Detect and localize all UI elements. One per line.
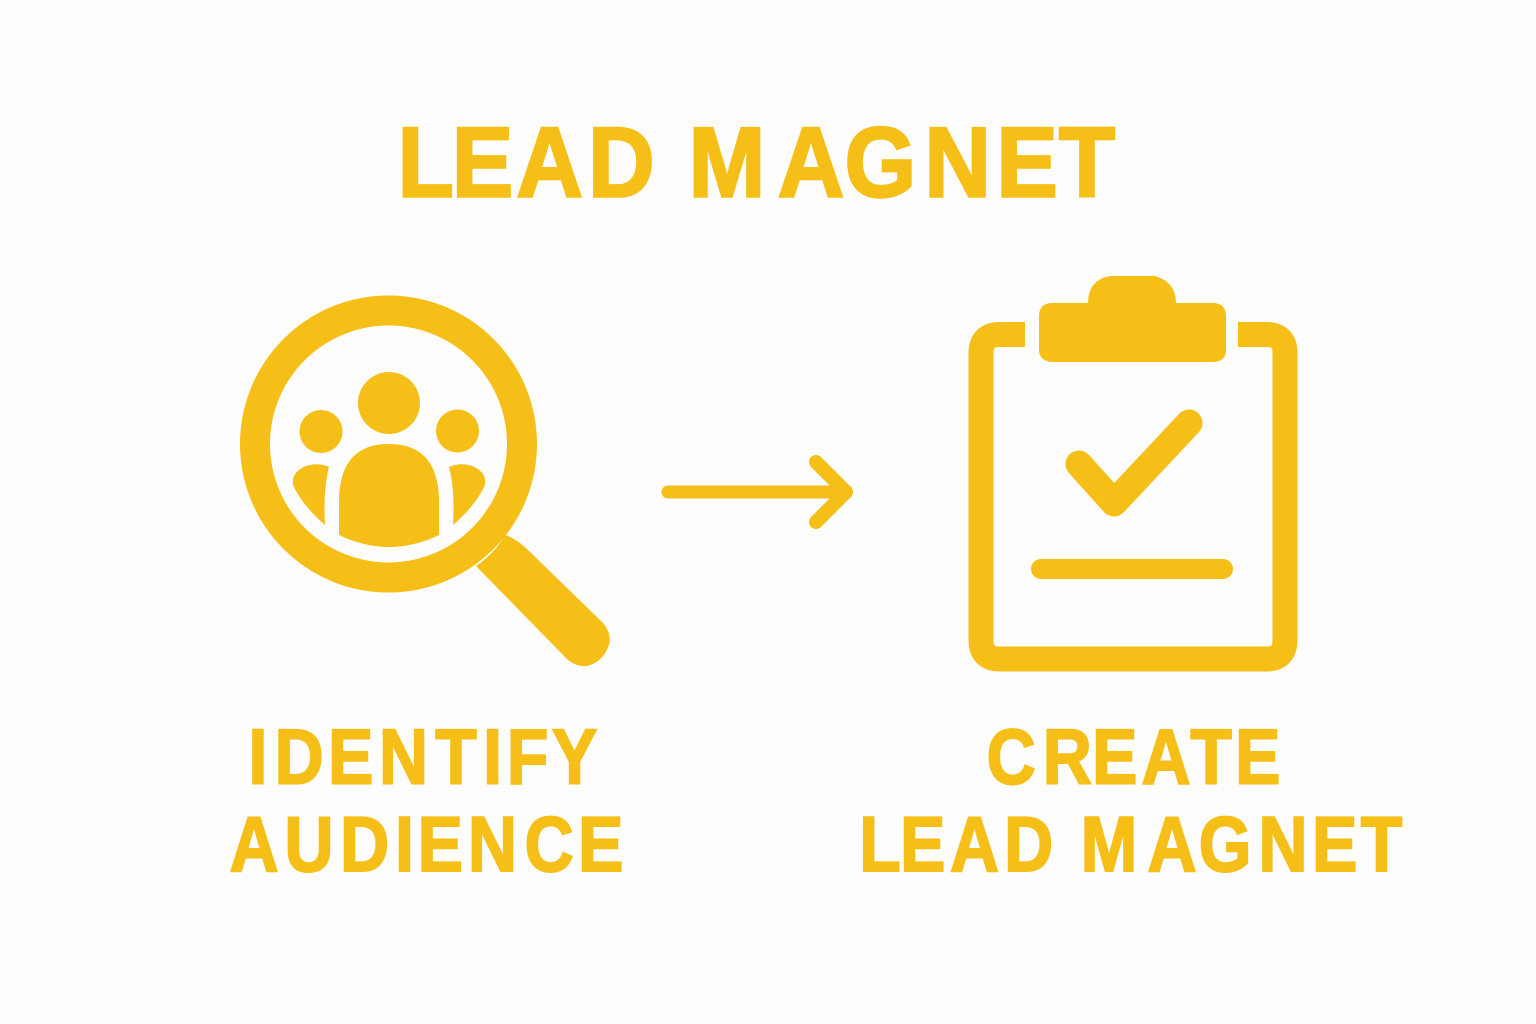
right person xyxy=(436,410,485,525)
icon: clipboard with checkmark xyxy=(981,276,1285,659)
left person xyxy=(293,410,342,525)
label: identify audience: AUDIENCE xyxy=(230,802,623,888)
label: create lead magnet xyxy=(859,714,1402,888)
label: identify audience: IDENTIFY xyxy=(249,714,597,800)
arrow xyxy=(668,462,846,522)
checkmark xyxy=(1079,423,1189,503)
icon: magnifying glass with audience xyxy=(255,310,610,666)
clipboard clip xyxy=(1039,276,1226,362)
center person xyxy=(339,372,439,547)
text line xyxy=(1041,559,1223,579)
clipboard board xyxy=(981,334,1285,659)
label: create lead magnet: CREATE xyxy=(987,714,1280,800)
label: identify audience xyxy=(230,714,623,888)
label: create lead magnet: LEAD MAGNET xyxy=(859,802,1402,888)
magnifier ring xyxy=(255,310,522,578)
title: LEAD MAGNET xyxy=(398,107,1115,218)
magnifier handle xyxy=(476,535,610,666)
